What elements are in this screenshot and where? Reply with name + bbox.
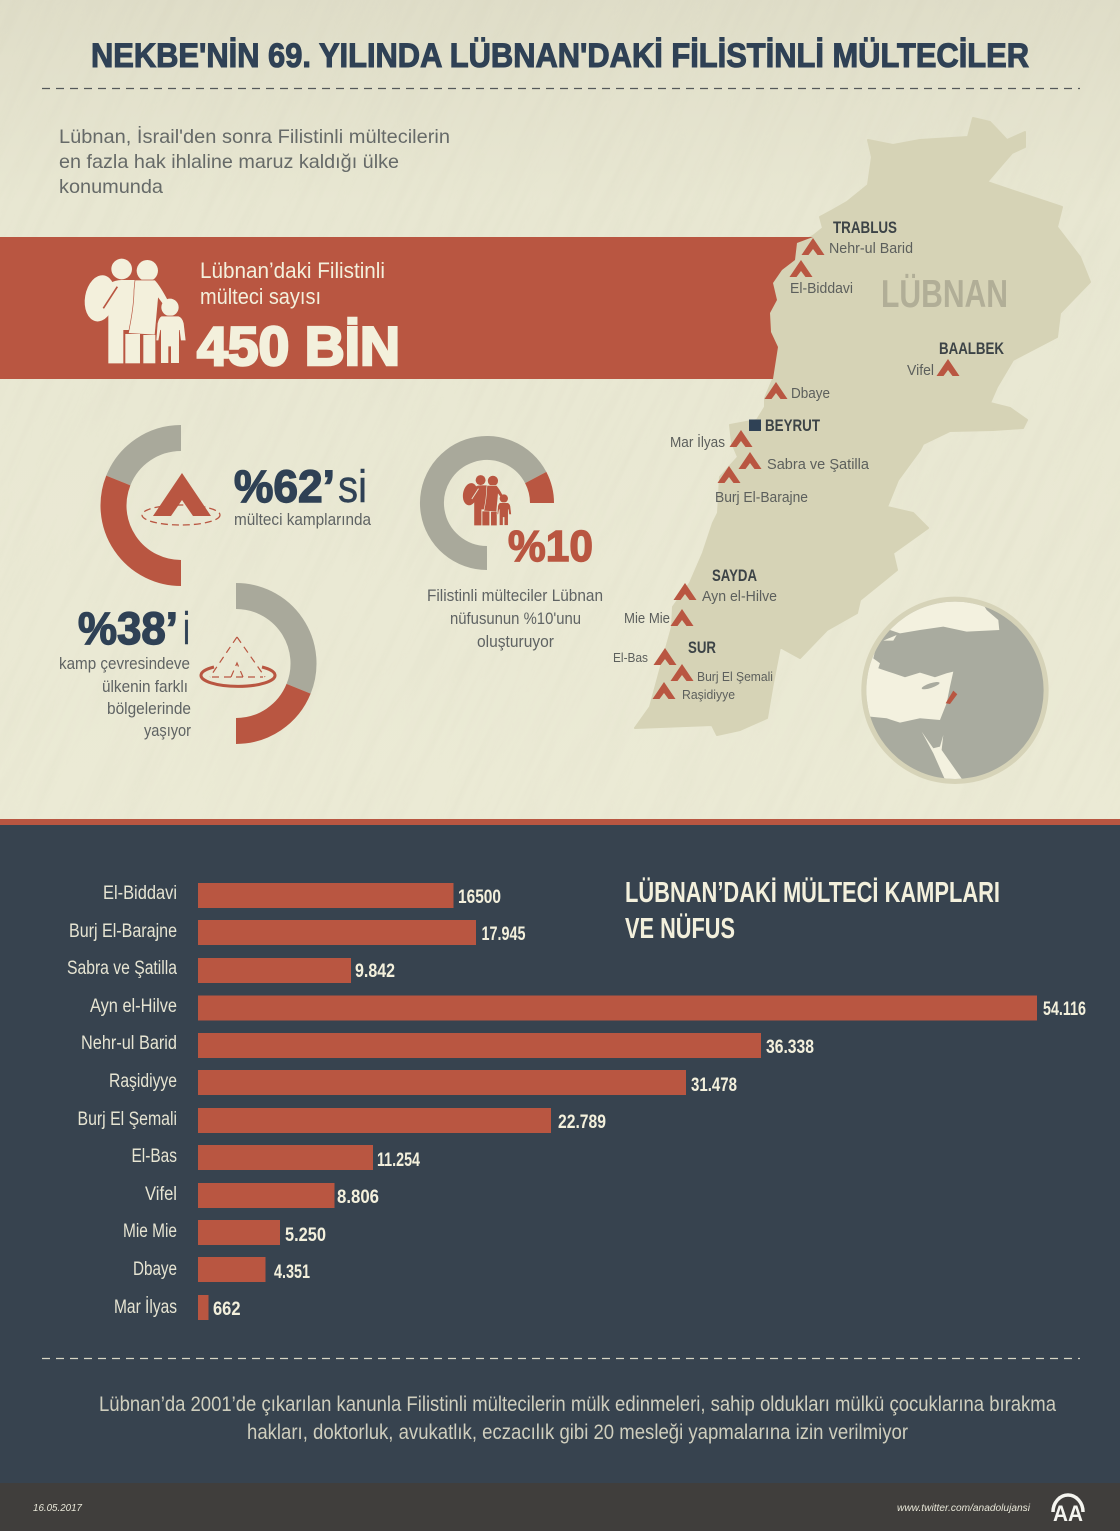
bar: Nehr-ul Barid: Nehr-ul Barid (81, 1033, 177, 1054)
bar: Ayn el-Hilve: 54.116 (1043, 999, 1086, 1020)
bar: Burj El Şemali: Burj El Şemali (78, 1109, 177, 1130)
bar: Burj El-Barajne: Burj El-Barajne (69, 921, 177, 942)
dark panel: camps and population (0, 819, 1120, 1483)
intro text: konumunda (59, 176, 163, 198)
donut: 10 percent of population: nüfusunun %10'unu (450, 609, 581, 628)
donut: 62 percent in camps: si (338, 461, 367, 512)
bar: Raşidiyye: Raşidiyye (109, 1071, 177, 1092)
bar: Sabra ve Şatilla: Sabra ve Şatilla (67, 958, 177, 979)
map labels: cities and camps: Nehr-ul Barid (829, 240, 913, 257)
social link: www.twitter.com/anadolujansi (897, 1503, 1031, 1514)
band text (197, 258, 400, 377)
bar: Dbaye: 4.351 (274, 1262, 310, 1283)
bar: Nehr-ul Barid: 36.338 (766, 1037, 814, 1058)
map labels: cities and camps: SAYDA (712, 566, 757, 585)
donut: 38 percent outside camps: ülkenin farklı (102, 677, 188, 696)
map labels: cities and camps: Sabra ve Şatilla (767, 456, 870, 473)
bar: Ayn el-Hilve (90, 996, 1086, 1020)
intro text: Lübnan, İsrail'den sonra Filistinli mültecilerin (59, 125, 450, 148)
bar: El-Bas: 11.254 (377, 1150, 420, 1171)
bar: Vifel: 8.806 (337, 1187, 379, 1208)
map labels: cities and camps: El-Bas (613, 650, 648, 665)
map labels: country name: LÜBNAN (881, 273, 1008, 316)
title: NEKBE'NİN 69. YILINDA LÜBNAN'DAKİ FİLİSTİNLİ MÜLTECİLER (91, 36, 1029, 75)
footer bar (0, 1483, 1120, 1531)
map labels: cities and camps: Mie Mie (624, 610, 670, 627)
icon: refugee family (81, 259, 186, 363)
band text: Lübnan’daki Filistinli (200, 258, 385, 283)
bar: El-Biddavi: 16500 (458, 887, 501, 908)
donut: 62 percent in camps: mülteci kamplarında (234, 510, 371, 529)
closing note (99, 1393, 1056, 1444)
bar chart: camp populations (67, 883, 1086, 1320)
donut: 62 percent in camps (113, 438, 371, 573)
donut: 10 percent of population: Filistinli mülteciler Lübnan (427, 586, 603, 605)
bar: Dbaye: Dbaye (133, 1259, 177, 1280)
map labels: cities and camps: Vifel (907, 362, 934, 379)
intro text (59, 125, 450, 198)
map labels: cities and camps: Mar İlyas (670, 433, 725, 451)
map labels: cities and camps: Burj El-Barajne (715, 489, 808, 506)
bar: Burj El-Barajne (69, 920, 526, 945)
bar: Mie Mie: Mie Mie (123, 1221, 177, 1242)
bar: Burj El Şemali (78, 1108, 606, 1133)
bar: Mie Mie (123, 1220, 326, 1246)
donut: 10 percent of population: oluşturuyor (477, 632, 554, 651)
bar: El-Biddavi (103, 883, 501, 908)
bar: Burj El-Barajne: 17.945 (482, 924, 526, 945)
donut: 38 percent outside camps: i (183, 603, 190, 654)
bar: Dbaye (133, 1257, 310, 1283)
bar: Vifel: Vifel (145, 1184, 177, 1205)
inset locator map (860, 593, 1049, 784)
chart heading: LÜBNAN’DAKİ MÜLTECİ KAMPLARI (625, 876, 1000, 909)
map labels: cities and camps (613, 218, 1005, 702)
bar: Raşidiyye (109, 1070, 737, 1096)
bar: El-Biddavi: El-Biddavi (103, 883, 177, 904)
bar: Sabra ve Şatilla (67, 958, 395, 983)
intro text: en fazla hak ihlaline maruz kaldığı ülke (59, 151, 399, 173)
closing note: hakları, doktorluk, avukatlık, eczacılık gibi 20 mesleği yapmalarına izin verilmiyor (247, 1421, 908, 1444)
bar: Raşidiyye: 31.478 (691, 1075, 737, 1096)
donut: 62 percent in camps: %62’ (234, 461, 335, 512)
logo: Anadolu Agency: AA (1053, 1501, 1083, 1526)
bar: Sabra ve Şatilla: 9.842 (355, 961, 395, 982)
bar: El-Bas: El-Bas (132, 1146, 177, 1167)
icon: small refugee family (461, 475, 511, 525)
background: paper texture (0, 0, 1120, 100)
bar: Mie Mie: 5.250 (285, 1225, 326, 1246)
bar: Nehr-ul Barid (81, 1033, 814, 1058)
map labels: cities and camps: Ayn el-Hilve (702, 588, 777, 605)
donut: 10 percent of population: %10 (508, 522, 593, 571)
bar: Burj El Şemali: 22.789 (558, 1112, 606, 1133)
icon: tent (142, 473, 220, 525)
map of Lebanon (635, 118, 1090, 735)
date: 16.05.2017 (33, 1503, 82, 1514)
map labels: cities and camps: BEYRUT (765, 416, 820, 435)
map labels: cities and camps: BAALBEK (939, 339, 1005, 358)
bar: Mar İlyas: Mar İlyas (114, 1297, 177, 1318)
chart heading: VE NÜFUS (625, 912, 735, 945)
bar: El-Bas (132, 1145, 420, 1171)
map labels: cities and camps: Burj El Şemali (697, 669, 773, 684)
map labels: cities and camps: El-Biddavi (790, 280, 853, 297)
red band: refugee count (0, 237, 813, 379)
map labels: cities and camps: TRABLUS (833, 218, 897, 237)
donut: 38 percent outside camps: kamp çevresindeve (59, 654, 190, 673)
map labels: cities and camps: Dbaye (791, 385, 830, 402)
band text: 450 BİN (197, 315, 400, 377)
donut: 38 percent outside camps (59, 596, 304, 740)
donut: 38 percent outside camps: yaşıyor (144, 721, 191, 740)
map labels: cities and camps: Raşidiyye (682, 687, 735, 702)
bar: Vifel (145, 1183, 379, 1208)
bar: Ayn el-Hilve: Ayn el-Hilve (90, 996, 177, 1017)
donut: 10 percent of population (427, 448, 603, 651)
donut: 38 percent outside camps: bölgelerinde (107, 699, 191, 718)
icon: dashed tent (201, 637, 275, 686)
map labels: cities and camps: SUR (688, 638, 716, 657)
bar: Mar İlyas: 662 (213, 1299, 240, 1320)
donut: 38 percent outside camps: %38’ (78, 603, 178, 654)
chart heading (625, 876, 1000, 945)
bar: Mar İlyas (114, 1295, 240, 1320)
band text: mülteci sayısı (200, 284, 321, 309)
map markers: refugee camps (652, 238, 960, 699)
